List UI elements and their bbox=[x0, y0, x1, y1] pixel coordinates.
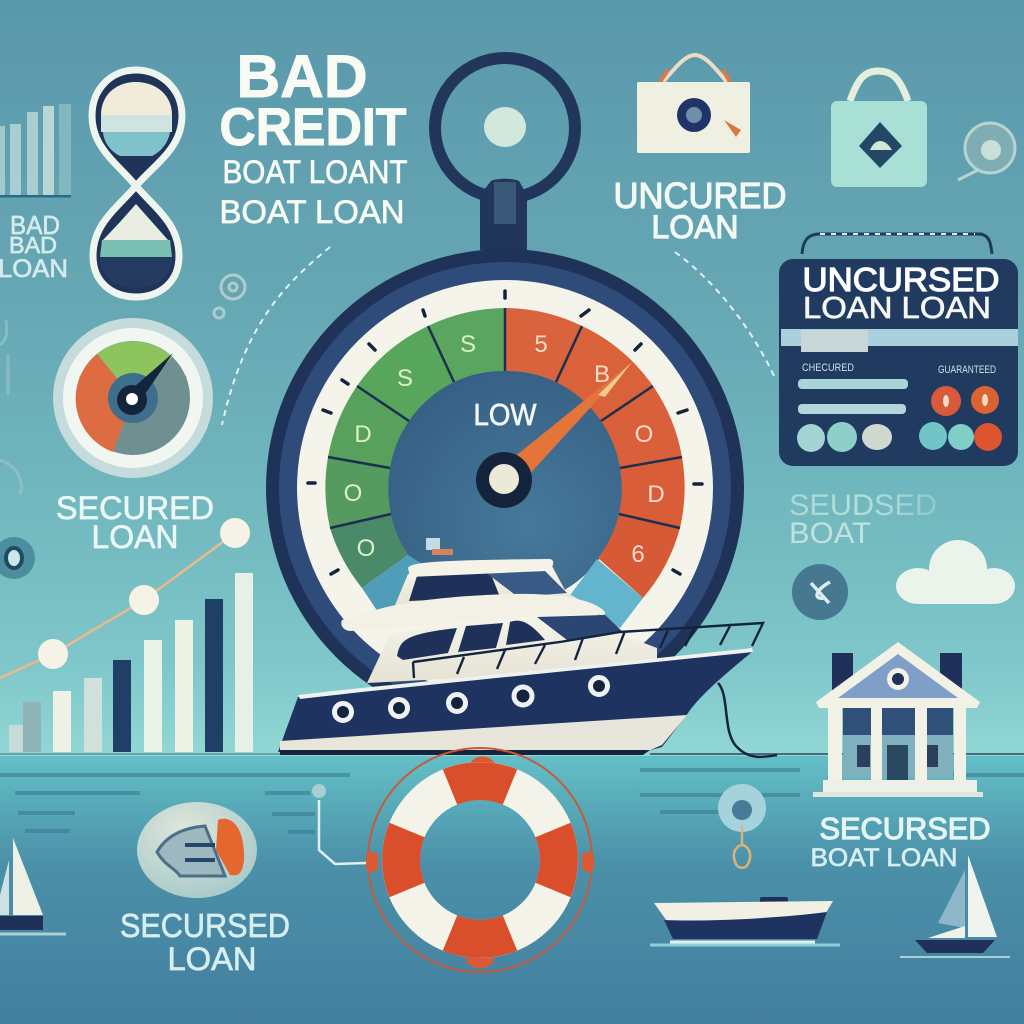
text: uncured loan: LOAN bbox=[652, 209, 738, 245]
dashed connector curves bbox=[222, 247, 775, 425]
text: seudsed boat: BOAT bbox=[789, 517, 871, 550]
icon: hourglass bbox=[92, 70, 182, 297]
icon: safety gear bbox=[137, 802, 257, 898]
text: secursed boat loan bbox=[810, 811, 990, 872]
title: BAD bbox=[236, 43, 368, 110]
icon: sailboat left bbox=[0, 838, 66, 934]
gauge ring handle bbox=[435, 58, 575, 250]
title: CREDIT bbox=[220, 98, 406, 157]
hook line bbox=[312, 784, 366, 864]
left text: bad loan bbox=[0, 210, 68, 283]
left bar chart bbox=[0, 104, 71, 198]
segment dividers bbox=[328, 308, 682, 528]
gauge tick marks bbox=[308, 291, 702, 574]
segment marks: D bbox=[647, 481, 665, 508]
left text: bad loan: BAD bbox=[10, 210, 60, 240]
left text: bad loan: BAD bbox=[9, 232, 57, 258]
small dial icon bbox=[426, 538, 453, 555]
gauge dial bbox=[387, 370, 623, 606]
icon: small boat bbox=[650, 897, 840, 945]
icon: padlock bag bbox=[831, 71, 927, 187]
portholes bbox=[334, 678, 608, 720]
segment marks: S bbox=[397, 365, 413, 392]
panel: uncursed loan card: CHECURED bbox=[802, 362, 854, 374]
small eye icon bbox=[214, 275, 245, 318]
flybridge deck bbox=[341, 594, 605, 631]
text: uncured loan: UNCURED bbox=[614, 175, 786, 216]
life ring bbox=[366, 748, 594, 972]
segment marks: D bbox=[354, 421, 372, 448]
growth line chart bbox=[0, 518, 250, 678]
hull bbox=[278, 652, 752, 752]
segment marks: O bbox=[357, 535, 375, 562]
lower windows bbox=[397, 628, 457, 660]
green segments bbox=[325, 308, 505, 588]
text: seudsed boat: SEUDSED bbox=[789, 489, 937, 522]
upper cabin bbox=[393, 566, 590, 610]
gauge bbox=[266, 58, 744, 727]
text: secursed loan bottom left bbox=[120, 907, 290, 977]
icon: coin bbox=[958, 123, 1015, 180]
panel: uncursed loan card: LOAN LOAN bbox=[803, 290, 991, 325]
left edge small icon bbox=[0, 537, 35, 579]
text: secursed loan bottom left: SECURSED bbox=[120, 907, 290, 944]
segment marks: 5 bbox=[534, 331, 548, 358]
rail bbox=[413, 623, 763, 678]
gauge label: low: LOW bbox=[474, 397, 537, 432]
icon: cloud bbox=[896, 540, 1015, 604]
title bbox=[220, 43, 408, 230]
lower cabin bbox=[367, 614, 657, 683]
yacht bbox=[278, 559, 763, 755]
segment marks: 6 bbox=[631, 541, 645, 568]
red segments bbox=[505, 308, 685, 598]
bar chart bottom left bbox=[9, 573, 253, 752]
segment marks: O bbox=[635, 421, 653, 448]
segment marks: S bbox=[460, 331, 476, 358]
segment marks: O bbox=[344, 480, 362, 507]
text: seudsed boat bbox=[789, 489, 937, 550]
segment marks: B bbox=[594, 361, 610, 388]
text: uncured loan bbox=[614, 175, 786, 245]
title: BOAT LOANT bbox=[222, 154, 408, 190]
mooring rope and horizon bbox=[0, 683, 1024, 757]
panel: uncursed loan card: GUARANTEED bbox=[938, 364, 996, 376]
left edge faint icons bbox=[0, 320, 21, 495]
left text: bad loan: LOAN bbox=[0, 255, 68, 283]
gauge needle bbox=[476, 362, 632, 508]
text: secursed boat loan: BOAT LOAN bbox=[810, 844, 958, 872]
text: secured loan left: LOAN bbox=[92, 519, 178, 555]
segment marks bbox=[344, 331, 665, 568]
text: secured loan left: SECURED bbox=[56, 490, 214, 526]
icon: handbag document bbox=[637, 55, 750, 153]
gauge outer bezel bbox=[266, 249, 744, 727]
panel: uncursed loan card: UNCURSED bbox=[802, 261, 1000, 298]
panel: uncursed loan card bbox=[779, 234, 1018, 466]
text: secursed boat loan: SECURSED bbox=[820, 811, 990, 846]
icon: magnifier badge bbox=[792, 564, 848, 620]
icon: sailboat right bbox=[900, 855, 1010, 957]
icon: bank bbox=[813, 642, 983, 797]
icon: small gauge bbox=[53, 318, 213, 478]
title: BOAT LOAN bbox=[220, 194, 404, 230]
light wedges below dial bbox=[362, 555, 643, 628]
text: secured loan left bbox=[56, 490, 214, 555]
text: secursed loan bottom left: LOAN bbox=[168, 941, 256, 977]
icon: anchor badge bbox=[718, 784, 766, 868]
